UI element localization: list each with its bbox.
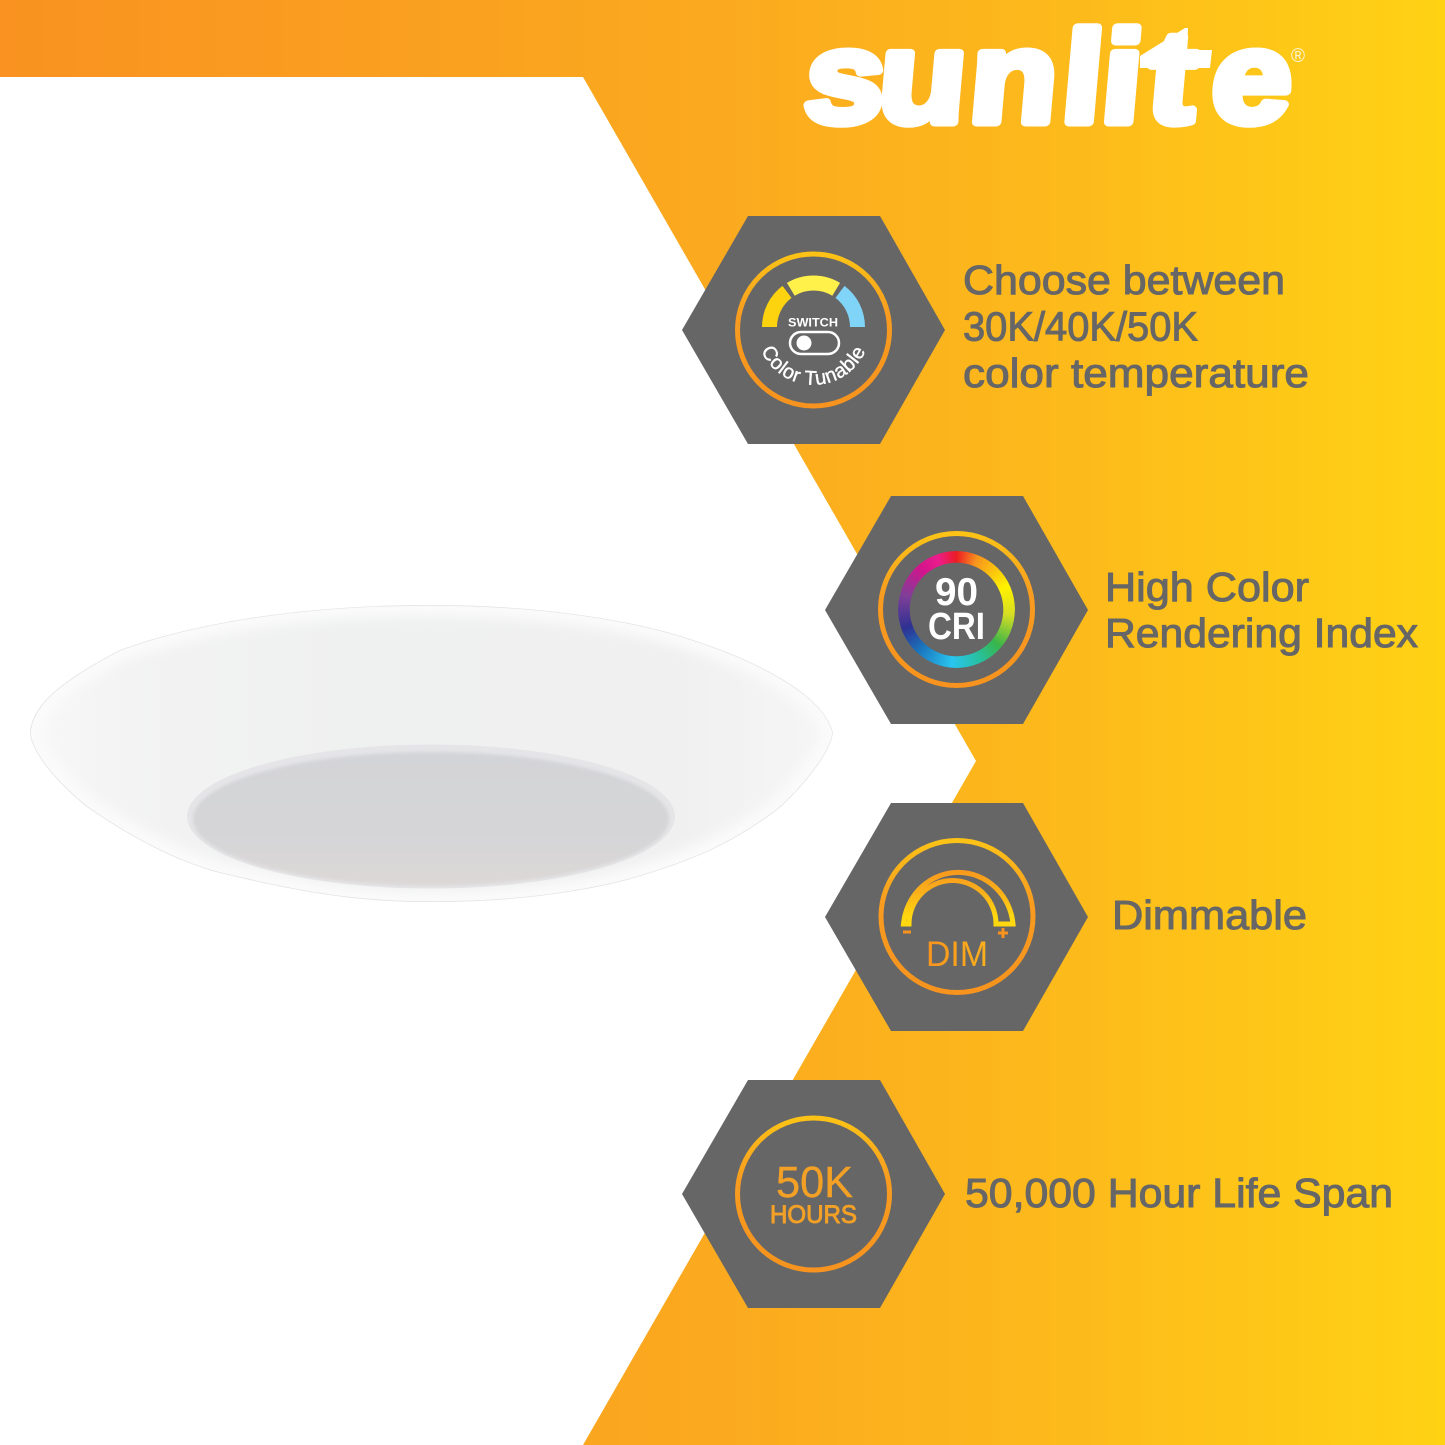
icon: 50K hours: HOURS — [770, 1201, 857, 1229]
icon: 90 CRI color wheel: CRI — [928, 606, 985, 648]
icon: dim arc: DIM — [926, 935, 988, 974]
caption: 30K/40K/50K — [963, 304, 1198, 350]
hexagon badge — [825, 803, 1088, 1031]
hexagon badge — [682, 1080, 945, 1308]
hexagon badge — [682, 216, 945, 444]
white angled panel — [0, 77, 976, 1445]
sunlite logo: sunlite — [799, 5, 1299, 150]
caption — [963, 257, 1309, 396]
product photo: round LED disk light — [30, 605, 833, 902]
icon: color tunable switch — [735, 252, 892, 408]
caption: color temperature — [963, 350, 1309, 396]
hexagon badge — [825, 496, 1088, 724]
sunlite logo: ® — [1291, 46, 1305, 67]
icon: color tunable switch: SWITCH — [788, 316, 838, 330]
caption — [1105, 564, 1418, 656]
feature 4: life span — [682, 1080, 1393, 1308]
feature 2: high CRI — [825, 496, 1418, 724]
feature 3: dimmable — [825, 803, 1307, 1031]
caption: Dimmable — [1112, 892, 1307, 938]
caption: High Color — [1105, 564, 1309, 610]
icon: 90 CRI color wheel — [880, 534, 1032, 686]
icon: dim arc — [881, 840, 1033, 992]
icon: 50K hours — [738, 1118, 890, 1270]
icon: 90 CRI color wheel: 90 — [935, 571, 978, 614]
caption: Choose between — [963, 257, 1285, 303]
caption: Rendering Index — [1105, 610, 1418, 656]
feature 1: color tunable — [682, 216, 1309, 444]
caption: 50,000 Hour Life Span — [965, 1170, 1393, 1216]
icon: color tunable switch: Color Tunable — [763, 346, 864, 385]
icon: 50K hours: 50K — [776, 1158, 853, 1207]
